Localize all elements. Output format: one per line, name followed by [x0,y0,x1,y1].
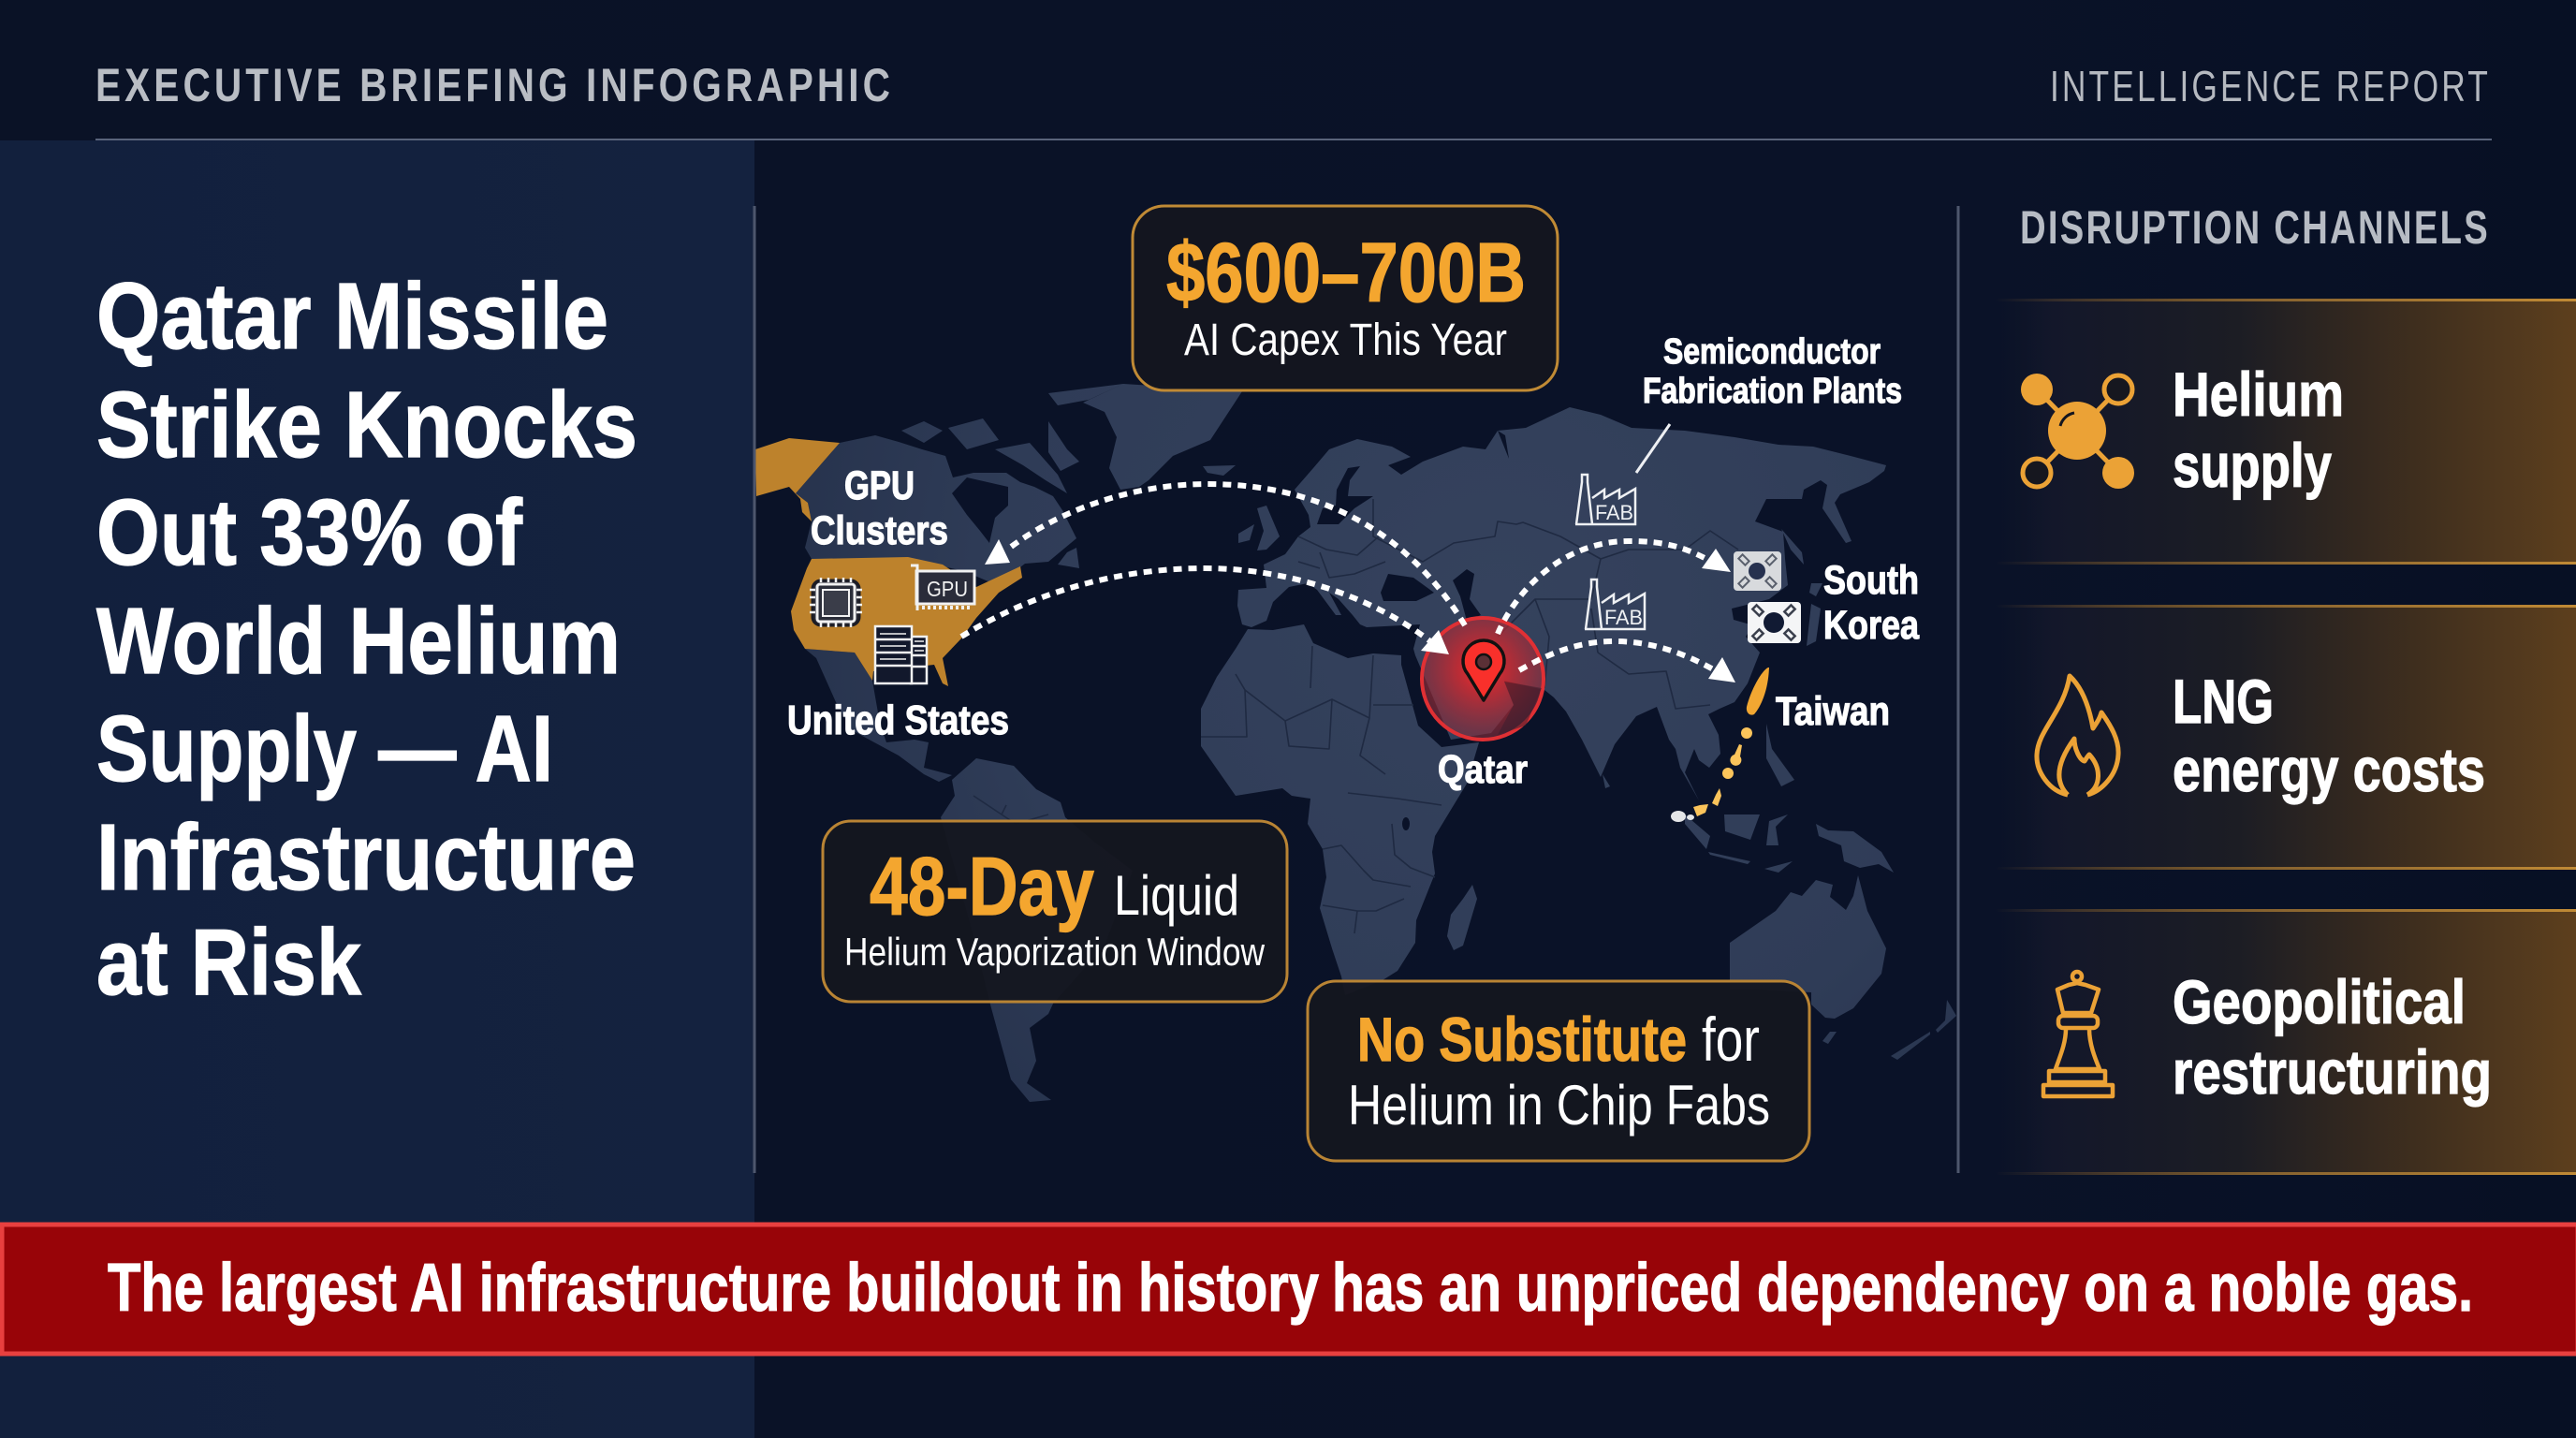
leader line to fab [1636,424,1670,473]
Asia Pacific islands [1447,529,1894,950]
panel: geopolitical restructuring card [1995,909,2576,1175]
callout: AI capex [1133,206,1558,390]
North America: Canada [796,435,1076,585]
callout: 48-day window: Liquid [1114,864,1239,927]
map label: Semiconductor Fabrication Plants: Semiconductor [1663,332,1881,372]
banner: bottom takeaway: The largest AI infrastructure buildout in history [108,1251,1319,1326]
panel: helium supply card: Helium [2173,360,2344,429]
header: eyebrow: EXECUTIVE BRIEFING INFOGRAPHIC [95,59,894,111]
panel: helium supply card: supply [2173,431,2332,500]
map label: United States: United States [787,697,1009,743]
icon: GPU card [911,565,974,610]
callout: no substitute [1308,981,1809,1161]
map label: GPU Clusters: Clusters [811,508,948,553]
Central and South America [805,649,1133,1102]
panel: LNG energy costs card [1995,605,2576,870]
title: Qatar Missile [96,264,608,369]
icon: GPU card: GPU [927,577,968,601]
map label: South Korea [1823,558,1920,648]
Australia and New Zealand [1730,875,1956,1060]
icon: South Korea flag one [1734,551,1781,591]
title: Strike Knocks [96,373,637,477]
callout: 48-day window: Helium Vaporization Window [844,930,1266,974]
title [96,264,637,1015]
highlight: United States and Alaska [755,438,1022,686]
arrowheads [985,539,1735,682]
panel: LNG energy costs card: LNG [2173,667,2274,736]
icon: flame [2037,676,2118,795]
icon: fab factory south [1585,580,1645,629]
callout: 48-day window [823,821,1287,1002]
title: at Risk [96,910,361,1015]
map label: South Korea: Korea [1823,603,1920,648]
callout: no substitute: Helium in Chip Fabs [1348,1074,1770,1137]
icon: fab factory south: FAB [1604,606,1643,629]
Arctic islands and Greenland [901,384,1242,568]
icon: molecule [2021,374,2134,489]
world map [796,384,1956,1102]
Africa [1201,624,1479,995]
map label: Semiconductor Fabrication Plants [1643,332,1902,411]
panel: geopolitical restructuring card: Geopolitical [2173,967,2466,1036]
marker: Qatar strike zone [1422,618,1544,740]
map label: Taiwan: Taiwan [1776,689,1890,734]
panel: left headline background [0,140,754,1438]
banner: bottom takeaway [2,1225,2576,1354]
icon: server documents [875,626,927,683]
callout: no substitute: No Substitute [1357,1005,1687,1074]
UK and Ireland [1238,506,1280,550]
title: Out 33% of [96,480,523,585]
map label: GPU Clusters [811,463,948,553]
panel: geopolitical restructuring card: restructuring [2173,1037,2492,1107]
callout: AI capex: AI Capex This Year [1184,315,1507,365]
title: World Helium [96,589,621,694]
panel: helium supply card [1995,299,2576,565]
title: Supply — AI [96,697,553,801]
icon: location pin [1463,640,1504,700]
callout: AI capex: $600–700B [1166,227,1526,320]
icon: chess queen [2043,972,2113,1096]
panel: LNG energy costs card: energy costs [2173,735,2485,804]
map label: Qatar: Qatar [1438,747,1528,791]
callout: no substitute: for [1702,1005,1760,1074]
icon: CPU chip [810,578,862,627]
icon: fab factory north [1575,475,1635,524]
map label: South Korea: South [1823,558,1919,603]
country borders [973,499,1738,933]
map label: GPU Clusters: GPU [844,463,915,508]
icon: South Korea flag two [1748,602,1801,643]
inland seas [952,431,1509,830]
arrows: dotted supply routes [961,484,1715,670]
map label: Semiconductor Fabrication Plants: Fabrication Plants [1643,372,1902,411]
icon: fab factory north: FAB [1595,501,1633,524]
callout: 48-day window: 48-Day [870,840,1094,932]
title: Infrastructure [96,805,636,910]
highlight: Taiwan and chip supply chain [1671,668,1769,822]
Eurasia [1237,407,1886,800]
